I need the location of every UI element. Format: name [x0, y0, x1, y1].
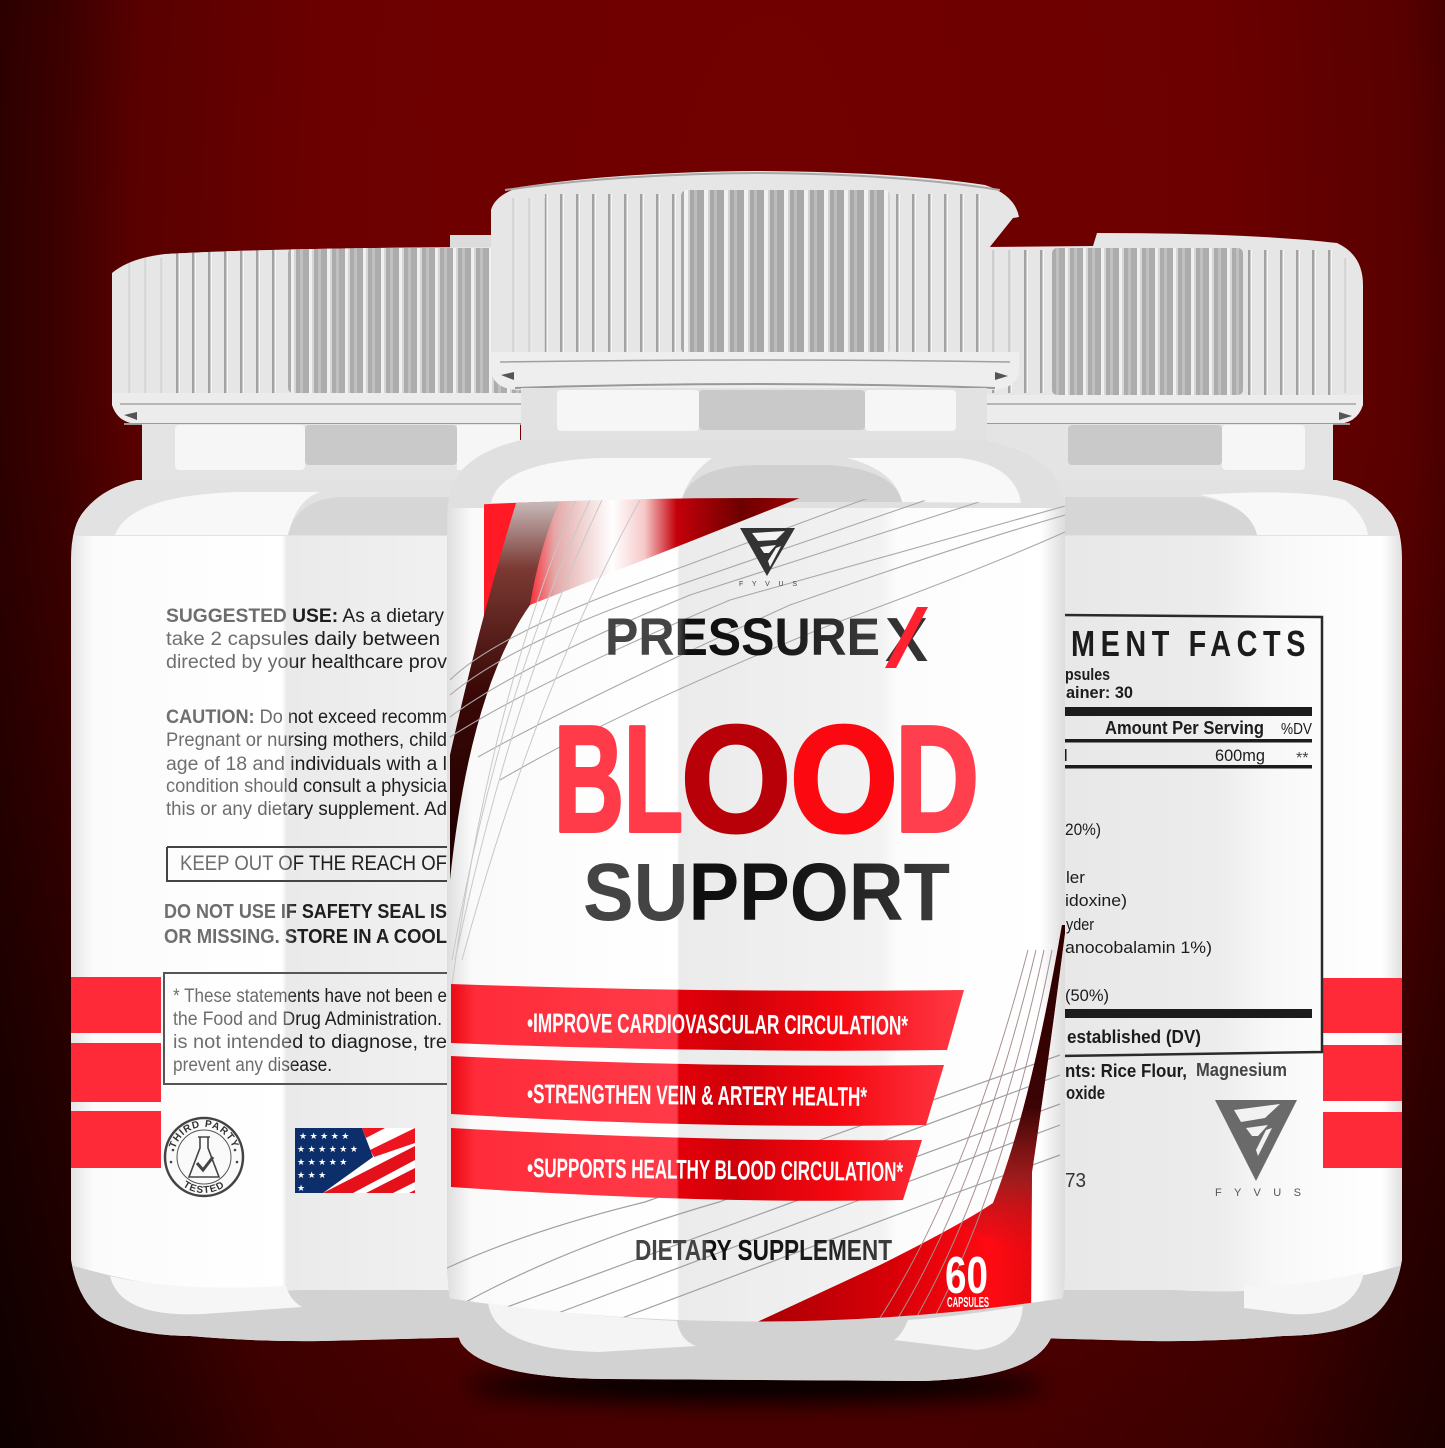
- icon: third party tested badge: TESTED: [184, 1180, 223, 1193]
- keep out of reach box: KEEP OUT OF THE REACH OF: [180, 852, 447, 875]
- product name: blood: [554, 694, 979, 863]
- right bottle cap: [980, 225, 1370, 424]
- left bottle body: [71, 480, 458, 1342]
- supplement facts panel: Amount Per Serving: [1105, 718, 1264, 738]
- suggested use text: take 2 capsules daily between: [166, 629, 440, 650]
- supplement facts panel: [1060, 615, 1322, 1056]
- supplement facts panel: yder: [1066, 915, 1094, 934]
- benefit banner 3: •SUPPORTS HEALTHY BLOOD CIRCULATION*: [527, 1153, 904, 1187]
- caution text: condition should consult a physicia: [166, 776, 447, 797]
- suggested use text: [166, 606, 448, 673]
- icon: fyvus logo: [739, 528, 797, 588]
- supplement facts panel: established (DV): [1067, 1027, 1201, 1047]
- supplement facts panel: %DV: [1281, 721, 1312, 738]
- right bottle red stripes: [1323, 978, 1402, 1168]
- supplement facts panel: idoxine): [1065, 891, 1127, 910]
- product name: support: SUPPORT: [583, 847, 950, 938]
- center bottle neck: [521, 388, 987, 448]
- caution text: this or any dietary supplement. Ad: [166, 799, 447, 820]
- other ingredients text: oxide: [1066, 1083, 1105, 1103]
- left bottle: [71, 235, 521, 1342]
- left bottle cap: [100, 235, 540, 424]
- supplement facts panel: anocobalamin 1%): [1065, 938, 1212, 957]
- other ingredients text: nts: Rice Flour,: [1065, 1061, 1187, 1081]
- suggested use text: SUGGESTED USE: As a dietary: [166, 606, 444, 627]
- icon: third party tested badge: [164, 1116, 244, 1198]
- other ingredients text: Magnesium: [1196, 1060, 1287, 1080]
- product name: blood: BL: [554, 694, 683, 863]
- safety seal warning: [164, 901, 447, 948]
- left bottle neck: [142, 424, 520, 484]
- lower label lines: [447, 1055, 1060, 1318]
- caution text: age of 18 and individuals with a l: [166, 754, 447, 775]
- disclaimer box: [164, 973, 450, 1084]
- partial code number: 73: [1065, 1170, 1086, 1192]
- icon: american flag: ★ ★ ★ ★ ★: [297, 1157, 347, 1167]
- supplement facts panel: MENT FACTS: [1071, 623, 1305, 664]
- suggested use text: directed by your healthcare prov: [166, 652, 448, 673]
- bottom right red corner: [755, 925, 1066, 1330]
- center bottle cap: [491, 171, 1019, 390]
- capsule count: 60: [945, 1247, 988, 1305]
- dark left swoosh: [450, 500, 560, 880]
- icon: third party tested badge: THIRD PARTY: [168, 1120, 239, 1147]
- icon: american flag: ★ ★ ★: [297, 1170, 326, 1180]
- floor shadow: [466, 1370, 1046, 1402]
- supplement facts panel: **: [1296, 750, 1308, 767]
- safety seal warning: DO NOT USE IF SAFETY SEAL IS: [164, 901, 447, 923]
- product name: blood: O: [681, 694, 791, 863]
- icon: fyvus logo on right bottle: [1215, 1100, 1301, 1199]
- icon: fyvus logo on right bottle: F Y V U S: [1215, 1187, 1301, 1199]
- capsule count: CAPSULES: [947, 1294, 989, 1311]
- disclaimer box: prevent any disease.: [173, 1055, 332, 1076]
- icon: american flag: ★ ★ ★ ★ ★: [299, 1131, 349, 1141]
- icon: fyvus logo: F Y V U S: [739, 581, 797, 588]
- caution text: Pregnant or nursing mothers, child: [166, 730, 447, 751]
- right bottle body: [1050, 480, 1402, 1342]
- upper label lines: [450, 498, 1065, 780]
- icon: american flag: ★ ★ ★ ★ ★ ★: [297, 1144, 358, 1154]
- supplement facts panel: l: [1063, 746, 1068, 765]
- right bottle neck: [960, 424, 1333, 484]
- caution text: CAUTION: Do not exceed recomm: [166, 707, 447, 728]
- center label: [447, 496, 1066, 1330]
- steep right lines: [880, 950, 1052, 1318]
- brand name: pressure x: X: [885, 606, 928, 675]
- safety seal warning: OR MISSING. STORE IN A COOL: [164, 926, 447, 948]
- supplement facts panel: ainer: 30: [1066, 683, 1133, 702]
- left bottle red stripes: [71, 977, 161, 1168]
- product name: blood: O: [790, 694, 898, 863]
- brand name: pressure x: PRESSURE: [605, 608, 880, 667]
- dietary supplement line: DIETARY SUPPLEMENT: [635, 1235, 892, 1267]
- benefit banner 2: •STRENGTHEN VEIN & ARTERY HEALTH*: [527, 1079, 868, 1112]
- supplement facts panel: 20%): [1065, 820, 1101, 839]
- steep left lines: [452, 500, 640, 985]
- supplement facts panel: (50%): [1065, 986, 1109, 1005]
- benefit banner 1: •IMPROVE CARDIOVASCULAR CIRCULATION*: [527, 1008, 908, 1041]
- benefit banner 2: [451, 1056, 944, 1126]
- keep out of reach box: [167, 847, 450, 881]
- disclaimer box: is not intended to diagnose, tre: [173, 1032, 447, 1053]
- right bottle: [987, 233, 1402, 1342]
- dark right swoosh: [960, 925, 1066, 1255]
- product name: blood: D: [895, 694, 979, 863]
- benefit banner 1: [451, 984, 964, 1051]
- disclaimer box: * These statements have not been e: [173, 986, 447, 1007]
- supplement facts panel: psules: [1065, 665, 1110, 684]
- icon: american flag: ★: [297, 1183, 305, 1193]
- supplement facts panel: ler: [1066, 868, 1085, 887]
- supplement facts panel: 600mg: [1215, 746, 1265, 765]
- center bottle body: [440, 430, 1070, 1390]
- disclaimer box: the Food and Drug Administration.: [173, 1009, 442, 1030]
- top left red corner: [484, 498, 800, 615]
- caution text: [166, 707, 447, 820]
- other ingredients text: [1065, 1060, 1287, 1103]
- benefit banner 3: [451, 1128, 922, 1201]
- icon: american flag: [295, 1128, 415, 1193]
- center bottle: [440, 171, 1070, 1390]
